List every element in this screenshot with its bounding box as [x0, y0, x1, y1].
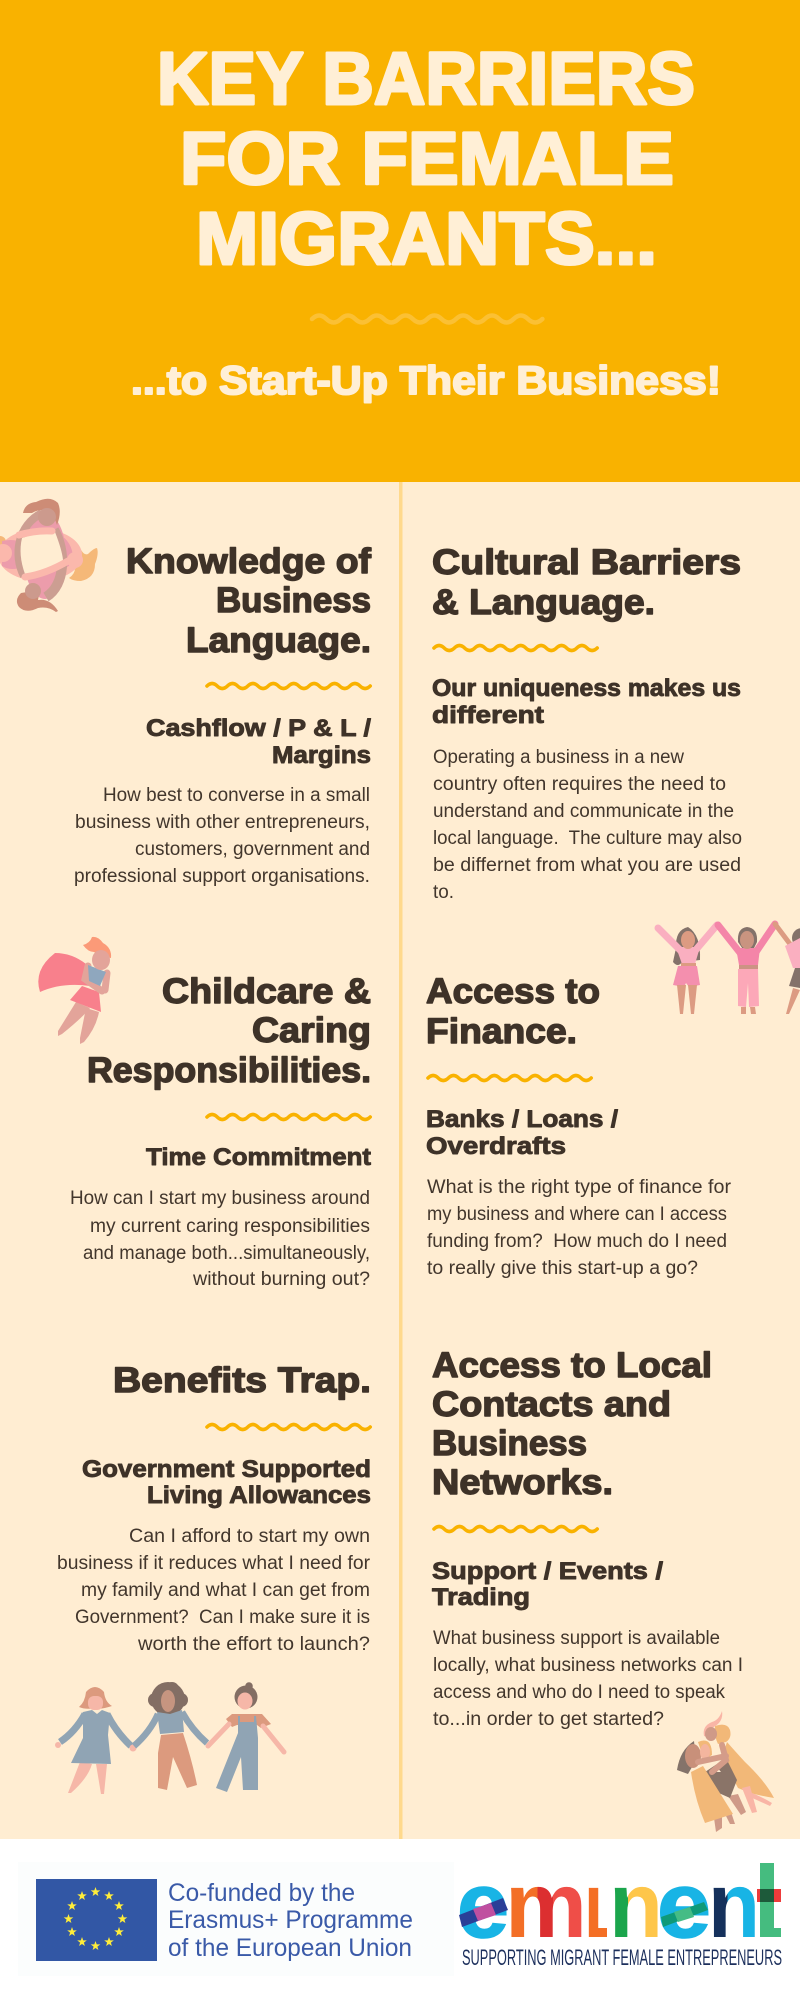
co-funded statement: of the European Union [168, 1934, 412, 1962]
body text: be differnet from what you are used [433, 855, 741, 876]
heading: Networks. [432, 1463, 613, 1502]
body text: Can I afford to start my own [129, 1526, 370, 1547]
heading: Cultural Barriers [432, 543, 741, 582]
heading: Knowledge of [126, 542, 371, 581]
icon: women holding hands raised [658, 924, 800, 1014]
centre divider line [399, 482, 402, 1839]
woman three [775, 924, 800, 1014]
wordmark: ı [584, 1853, 603, 1957]
woman two [718, 924, 775, 1014]
body text: understand and communicate in the [433, 801, 734, 822]
squiggle [207, 1424, 370, 1430]
left hair [677, 1741, 696, 1774]
co-funded statement [168, 1879, 413, 1962]
heading: Responsibilities. [87, 1051, 371, 1090]
title squiggle [312, 316, 542, 322]
heading [126, 542, 371, 660]
subheading: Government Supported [82, 1456, 371, 1483]
panel: access to finance [426, 972, 732, 1279]
body text: What is the right type of finance for [427, 1177, 732, 1198]
squiggle [207, 684, 370, 688]
icon: flying women embracing [677, 1711, 774, 1832]
body text: locally, what business networks can I [433, 1655, 743, 1676]
woman with bun and overalls [208, 1682, 284, 1792]
squiggle [434, 646, 597, 650]
panel: knowledge of business language [74, 542, 371, 887]
subtitle: ...to Start-Up Their Business! [131, 359, 721, 403]
heading: Childcare & [162, 972, 371, 1011]
heading: Finance. [426, 1012, 577, 1051]
woman with curly hair [134, 1682, 207, 1790]
body text: What business support is available [433, 1628, 720, 1649]
body text: and manage both...simultaneously, [83, 1243, 370, 1264]
heading: Business [432, 1424, 587, 1463]
body text: How best to converse in a small [103, 785, 370, 806]
subheading: Living Allowances [147, 1482, 371, 1509]
body text: without burning out? [192, 1269, 370, 1290]
heading: Access to Local [432, 1346, 712, 1385]
subheading: different [432, 702, 544, 729]
panel: cultural barriers and language [432, 543, 742, 903]
co-funded statement: Erasmus+ Programme [168, 1906, 413, 1934]
subheading: Margins [272, 742, 371, 769]
body text: How can I start my business around [70, 1188, 370, 1209]
subheading: Support / Events / [432, 1558, 663, 1585]
body text: access and who do I need to speak [433, 1682, 725, 1703]
heads and arms [698, 1741, 712, 1760]
body text: professional support organisations. [74, 866, 370, 887]
subheading: Overdrafts [426, 1133, 566, 1160]
title [157, 37, 695, 280]
subheading [82, 1456, 371, 1509]
body text: Government? Can I make sure it is [75, 1607, 370, 1628]
right cape [722, 1742, 774, 1798]
heading: & Language. [432, 583, 655, 622]
wordmark: n [609, 1853, 663, 1957]
body text [70, 1188, 370, 1290]
body [705, 1758, 737, 1798]
heading [426, 972, 600, 1051]
logo: emınent [457, 1853, 782, 1970]
body text: my family and what I can get from [81, 1580, 370, 1601]
squiggle [207, 1114, 370, 1120]
body text: my business and where can I access [427, 1204, 727, 1225]
co-funded statement: Co-funded by the [168, 1879, 355, 1907]
body text: to...in order to get started? [433, 1709, 664, 1730]
subheading: Banks / Loans / [426, 1106, 618, 1133]
panel: yellow header [0, 0, 800, 482]
icon: EU flag [36, 1879, 157, 1961]
body text: local language. The culture may also [433, 828, 742, 849]
subheading [432, 1558, 663, 1611]
body text: to really give this start-up a go? [427, 1258, 698, 1279]
title: FOR FEMALE [180, 117, 674, 200]
title: KEY BARRIERS [157, 37, 695, 120]
subheading [432, 675, 741, 729]
subheading: Time Commitment [146, 1144, 371, 1171]
panel: benefits trap [57, 1361, 371, 1655]
panel: access to local contacts and business networks [432, 1346, 743, 1730]
body text: my current caring responsibilities [90, 1216, 370, 1237]
heading: Business [216, 581, 371, 620]
legs [728, 1794, 746, 1815]
body text [433, 747, 742, 903]
woman with bob and dress [55, 1687, 136, 1794]
heading: Benefits Trap. [113, 1361, 371, 1400]
body text: customers, government and [135, 839, 370, 860]
squiggle [428, 1076, 591, 1080]
wordmark: n [708, 1853, 760, 1957]
subheading [426, 1106, 618, 1160]
skirt [70, 986, 101, 1012]
panel: cream content background [0, 482, 800, 1839]
body text: to. [433, 882, 454, 903]
icon: women in a circle [0, 499, 98, 612]
legs [58, 1002, 90, 1036]
heading: Contacts and [432, 1385, 671, 1424]
body text: Operating a business in a new [433, 747, 684, 768]
hair and head [83, 937, 111, 958]
body text: worth the effort to launch? [137, 1634, 370, 1655]
arms and torso [85, 966, 107, 991]
icon: flying woman with cape [38, 937, 111, 1044]
subheading: Cashflow / P & L / [146, 715, 371, 742]
body text [74, 785, 370, 887]
subheading: Trading [432, 1584, 530, 1611]
wordmark [457, 1853, 781, 1957]
heading: Language. [186, 621, 371, 660]
heading: Caring [252, 1011, 371, 1050]
body text [427, 1177, 732, 1279]
body text [57, 1526, 371, 1655]
heading [432, 1346, 712, 1502]
heading: Access to [426, 972, 600, 1011]
wordmark: m [505, 1853, 587, 1957]
wordmark: e [457, 1853, 509, 1957]
swoop and hair [704, 1711, 722, 1738]
body text: business if it reduces what I need for [57, 1553, 371, 1574]
cape [38, 953, 90, 992]
subheading [146, 715, 371, 769]
title: MIGRANTS... [196, 197, 657, 280]
panel: childcare and caring responsibilities [70, 972, 371, 1290]
body text: funding from? How much do I need [427, 1231, 727, 1252]
heading [432, 543, 741, 622]
logo: Erasmus+ co-funding block [18, 1862, 454, 1976]
body text: business with other entrepreneurs, [75, 812, 370, 833]
body text [433, 1628, 743, 1730]
icon: three women holding hands [55, 1682, 284, 1794]
squiggle [434, 1526, 597, 1532]
subheading: Our uniqueness makes us [432, 675, 741, 702]
panel: white footer [0, 1839, 800, 2000]
woman one [658, 925, 717, 1014]
heading [87, 972, 371, 1090]
body text: country often requires the need to [433, 774, 726, 795]
left cape [691, 1766, 733, 1823]
wordmark: e [657, 1853, 711, 1957]
